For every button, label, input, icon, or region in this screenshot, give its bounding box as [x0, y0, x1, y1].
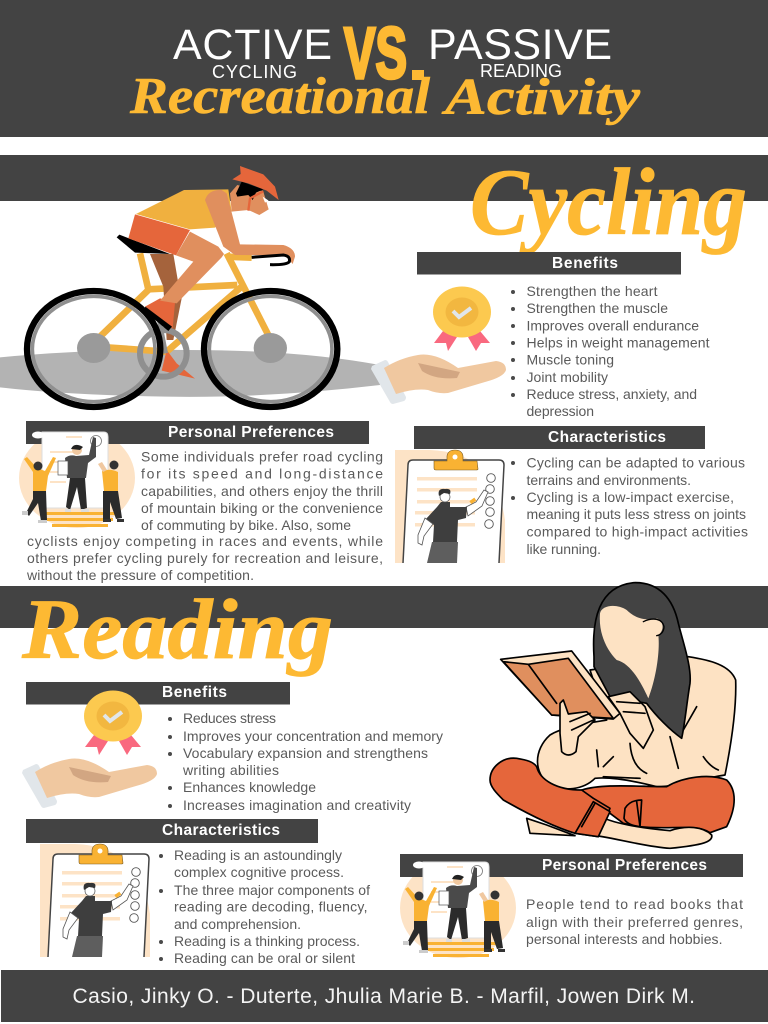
title banner [0, 0, 768, 137]
icon: hand holding medal (reading) [22, 690, 157, 808]
subtitle: reading: READING [480, 61, 562, 81]
list: reading benefits: Enhances knowledge [183, 779, 316, 795]
list: cycling benefits [511, 283, 710, 419]
list: reading characteristics: Reading is an astoundingly [174, 847, 342, 863]
text: reading personal preferences [526, 896, 743, 947]
text: cycling personal preferences [26, 448, 383, 583]
text: reading personal preferences: personal interests and hobbies. [526, 931, 722, 947]
heading bar: reading benefits: Benefits [162, 684, 227, 701]
text: reading personal preferences: align with their preferred genres, [526, 914, 743, 930]
footer: authors [1, 970, 768, 1022]
list: cycling characteristics [511, 454, 748, 557]
list: cycling characteristics: like running. [526, 541, 601, 557]
list: reading benefits: Improves your concentration and memory [183, 728, 443, 744]
illustration: man ticking clipboard (cycling) [395, 450, 505, 563]
title word: VS: VS [344, 14, 407, 94]
list: cycling characteristics: Cycling can be adapted to various [526, 454, 745, 470]
script title: Recreational Activity: Recreational [129, 68, 431, 125]
heading bar: cycling personal preferences [26, 421, 369, 444]
text: cycling personal preferences: cyclists enjoy competing in races and events, while [27, 533, 383, 549]
list: reading characteristics: complex cognitive process. [174, 864, 344, 880]
text: cycling personal preferences: for its speed and long-distance [141, 466, 383, 482]
list: cycling benefits: Reduce stress, anxiety, and [526, 386, 697, 402]
list: reading characteristics: Reading can be oral or silent [174, 950, 355, 966]
text: cycling personal preferences: of commuting by bike. Also, some [141, 517, 351, 533]
background circle: team illustration (cycling) [19, 428, 135, 528]
list: cycling benefits: Joint mobility [526, 369, 608, 385]
text: reading personal preferences: People tend to read books that [526, 896, 743, 912]
illustration: team with board (reading) [403, 862, 505, 957]
text: cycling personal preferences: Some individuals prefer road cycling [141, 448, 383, 464]
list: reading benefits: Vocabulary expansion and strengthens [183, 745, 428, 761]
heading: Reading: Reading [21, 581, 333, 677]
heading: Cycling: Cycling [470, 149, 747, 255]
script title: Recreational Activity: Activity [441, 69, 641, 126]
heading label: reading personal preferences: Personal Preferences [542, 857, 707, 874]
illustration: cyclist on bike [0, 166, 380, 407]
title word: PASSIVE: PASSIVE [428, 21, 612, 69]
text: cycling personal preferences: of mountain biking or the convenience [141, 500, 383, 516]
text: cycling personal preferences: capabilities, and others enjoy the thrill [141, 483, 383, 499]
heading bar: reading characteristics: Characteristics [162, 822, 280, 839]
reading section band [0, 586, 768, 628]
heading bar: cycling characteristics: Characteristics [548, 429, 666, 446]
heading bar: cycling benefits: Benefits [552, 255, 618, 272]
list: reading characteristics: and comprehension. [174, 916, 301, 932]
heading bar: reading personal preferences [400, 854, 743, 877]
list: reading benefits: Reduces stress [183, 710, 276, 726]
cycling section band [0, 155, 768, 201]
illustration: team with board (cycling) [22, 432, 124, 527]
icon: hand holding medal (cycling) [371, 286, 506, 404]
subtitle: cycling: CYCLING [212, 62, 297, 82]
list: reading benefits [168, 710, 443, 813]
illustration: man ticking clipboard (reading) [40, 844, 150, 957]
list: cycling characteristics: compared to high-impact activities [526, 524, 748, 540]
heading bar: reading benefits [26, 682, 290, 704]
list: cycling benefits: Muscle toning [526, 352, 614, 368]
list: reading characteristics: reading are decoding, fluency, [174, 898, 368, 914]
heading bar: cycling benefits [417, 252, 681, 274]
list: reading characteristics: Reading is a thinking process. [174, 933, 360, 949]
list: reading characteristics [159, 847, 370, 966]
heading label: cycling personal preferences: Personal Preferences [168, 424, 334, 441]
footer: authors: Casio, Jinky O. - Duterte, Jhulia Marie B. - Marfil, Jowen Dirk M. [72, 985, 695, 1008]
list: cycling characteristics: terrains and environments. [526, 472, 691, 488]
list: reading characteristics: The three major components of [174, 882, 370, 898]
list: cycling benefits: Helps in weight management [526, 334, 710, 350]
list: cycling benefits: Strengthen the heart [526, 283, 658, 299]
title word: ACTIVE: ACTIVE [173, 21, 332, 69]
text: cycling personal preferences: without the pressure of competition. [26, 567, 254, 583]
list: reading benefits: Increases imagination and creativity [183, 797, 411, 813]
list: cycling benefits: Strengthen the muscle [526, 300, 668, 316]
background circle: team illustration (reading) [400, 858, 516, 958]
script title: Recreational Activity [129, 68, 641, 126]
list: reading benefits: writing abilities [182, 762, 279, 778]
heading bar: reading characteristics [26, 819, 318, 843]
list: cycling benefits: depression [526, 403, 594, 419]
illustration: woman reading a book [490, 583, 736, 848]
list: cycling benefits: Improves overall endurance [526, 318, 699, 334]
list: cycling characteristics: Cycling is a low-impact exercise, [526, 489, 734, 505]
text: cycling personal preferences: others prefer cycling purely for recreation and leisure, [27, 550, 383, 566]
list: cycling characteristics: meaning it puts less stress on joints [526, 506, 746, 522]
heading bar: cycling characteristics [414, 426, 705, 449]
